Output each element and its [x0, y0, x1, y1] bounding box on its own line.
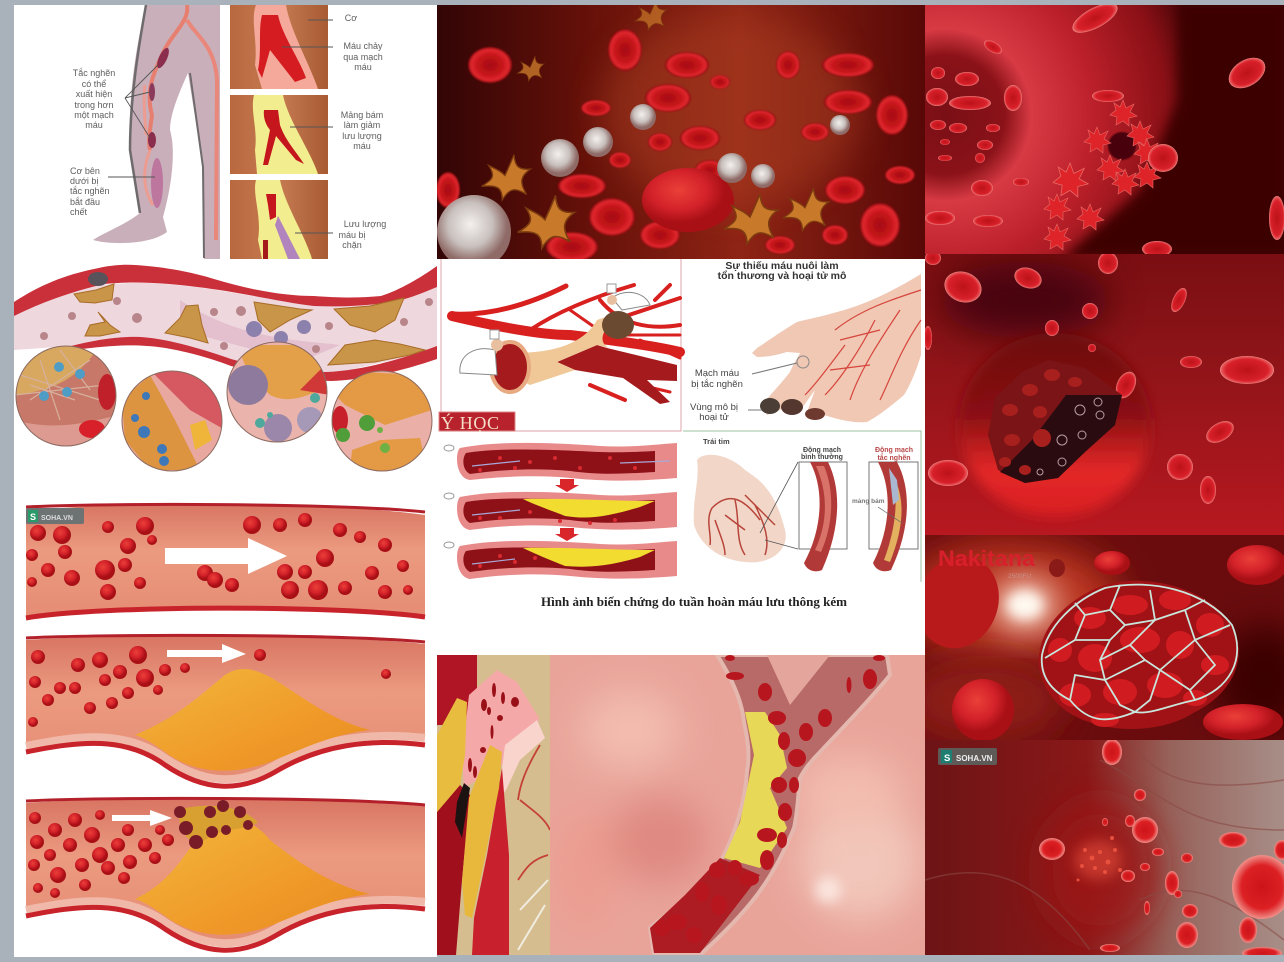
- illustration: plaque layers: [437, 698, 509, 955]
- panel: artery branch in tissue with plaque: [550, 655, 925, 955]
- text: hand labels: hoại tử: [699, 412, 729, 423]
- illustration: healthy artery inset: [230, 5, 328, 89]
- cells: platelets: [482, 0, 829, 248]
- text: blockage label: xuất hiện: [76, 89, 112, 99]
- illustration: normal coronary artery: bình thường: [801, 454, 843, 461]
- cells: red blood cells: [904, 544, 1284, 741]
- text: muscle label: dưới bị: [70, 176, 98, 186]
- panel: leg artery blockage diagram: [14, 5, 437, 259]
- text: blockage label: một mạch: [74, 110, 114, 120]
- text: blockage label: máu: [85, 120, 103, 130]
- illustration: normal coronary artery: Động mạch: [803, 447, 841, 454]
- illustration: vessel tunnel: [959, 333, 1151, 517]
- logo: Soha: [26, 508, 84, 524]
- circle: lipid detail: [122, 372, 222, 470]
- illustration: blocked artery inset: [230, 180, 328, 259]
- illustration: pink vessel lumen: [462, 670, 539, 788]
- illustration: blocked coronary artery: [852, 447, 918, 571]
- text: inset labels: lưu lượng: [342, 131, 382, 141]
- illustration: hand with necrotic fingers: [748, 274, 921, 422]
- heading: tissue damage: Sự thiếu máu nuôi làm: [725, 260, 839, 272]
- text: blockage label: Tắc nghẽn: [73, 68, 115, 78]
- panel: atherosclerotic plaque in artery: [14, 259, 437, 490]
- cells: red blood cells: [436, 29, 915, 262]
- text: inset labels: làm giảm: [344, 120, 380, 130]
- heading: tissue damage: tổn thương và hoại tử mô: [718, 270, 846, 282]
- text: heart label: Trái tim: [703, 437, 730, 446]
- artery: clotted with plaque: [26, 798, 425, 950]
- panel: Nakitana clot with fibrin mesh: [900, 535, 1284, 745]
- illustration: clot with fibrin network: [1039, 581, 1239, 729]
- illustration: artery with doctors cleaning plaque: [452, 284, 680, 404]
- logo: Soha: SOHA.VN: [41, 515, 73, 522]
- diagram: three stage artery narrowing: [444, 443, 677, 579]
- logo: Y Hoc: Ý HỌC: [441, 412, 499, 433]
- logo: Nakitana: 2500FU: [1008, 573, 1031, 580]
- illustration: leg with arteries: [93, 5, 220, 259]
- logo: Soha: SOHA.VN: [956, 754, 993, 763]
- text: muscle label: bắt đầu: [70, 197, 100, 207]
- panel: blood clot in vessel: [924, 251, 1284, 535]
- caption: Hình ảnh biến chứng do tuần hoàn máu lưu thông kém: [541, 594, 847, 609]
- text: inset labels: qua mạch: [343, 52, 383, 62]
- text: hand labels: Vùng mô bị: [690, 402, 738, 413]
- illustration: dark clot: [988, 360, 1122, 483]
- cells: red blood cells: [925, 0, 1284, 257]
- illustration: platelet speckle clot: [1074, 836, 1122, 882]
- text: muscle label: Cơ bên: [70, 166, 100, 176]
- panel: medical complications montage: [437, 259, 925, 655]
- text: inset labels: Máu chảy: [343, 41, 383, 51]
- logo: Soha: S: [944, 753, 950, 764]
- illustration: artery with yellow plaque: [650, 655, 890, 955]
- text: blockage label: có thể: [82, 79, 106, 89]
- text: inset labels: máu bị: [338, 230, 366, 240]
- text: inset labels: Lưu lượng: [344, 219, 386, 229]
- logo: Soha: S: [30, 512, 36, 522]
- cells: clotting platelets: [1044, 100, 1161, 250]
- text: inset labels: Cơ: [345, 13, 357, 23]
- cells: floating red blood cells: [924, 251, 1274, 504]
- logo: Nakitana: [938, 546, 1036, 580]
- illustration: normal coronary artery: [799, 447, 847, 571]
- text: hand labels: bị tắc nghẽn: [691, 379, 743, 390]
- artery: narrowed with plaque: [26, 635, 425, 786]
- panel: three artery stages: [14, 490, 437, 957]
- text: hand labels: Mạch máu: [695, 368, 739, 379]
- circle: foam cell detail: [332, 372, 432, 470]
- panel: Soha clot in tissue: [925, 739, 1284, 959]
- illustration: blocked coronary artery: tắc nghẽn: [877, 453, 911, 462]
- artery: normal flow: [26, 504, 425, 620]
- circle: macrophage detail: [228, 342, 326, 442]
- panel: red blood cells and platelets: [436, 0, 925, 269]
- cells: scattered red blood cells: [1039, 739, 1284, 959]
- logo: Nakitana: Nakitana: [938, 546, 1036, 571]
- text: muscle label: tắc nghẽn: [70, 186, 110, 196]
- text: inset labels: máu: [354, 62, 372, 72]
- cells: white blood cells: [437, 104, 850, 269]
- circle: fibrin detail: [16, 346, 116, 446]
- text: inset labels: máu: [353, 141, 371, 151]
- panel: vessel cutaway with plaque: [437, 655, 550, 955]
- logo: Soha: [938, 748, 997, 765]
- illustration: heart: [694, 455, 798, 562]
- illustration: blocked coronary artery: mảng bám: [852, 498, 885, 505]
- text: inset labels: chặn: [342, 240, 362, 250]
- illustration: blocked coronary artery: Động mạch: [875, 447, 913, 454]
- text: blockage label: trong hơn: [75, 100, 113, 110]
- text: inset labels: Mảng bám: [341, 110, 383, 120]
- illustration: artery with plaque: [14, 265, 437, 381]
- panel: clotting cells in vessel: [925, 0, 1284, 260]
- text: muscle label: chết: [70, 207, 88, 217]
- illustration: narrowed artery inset: [230, 95, 328, 174]
